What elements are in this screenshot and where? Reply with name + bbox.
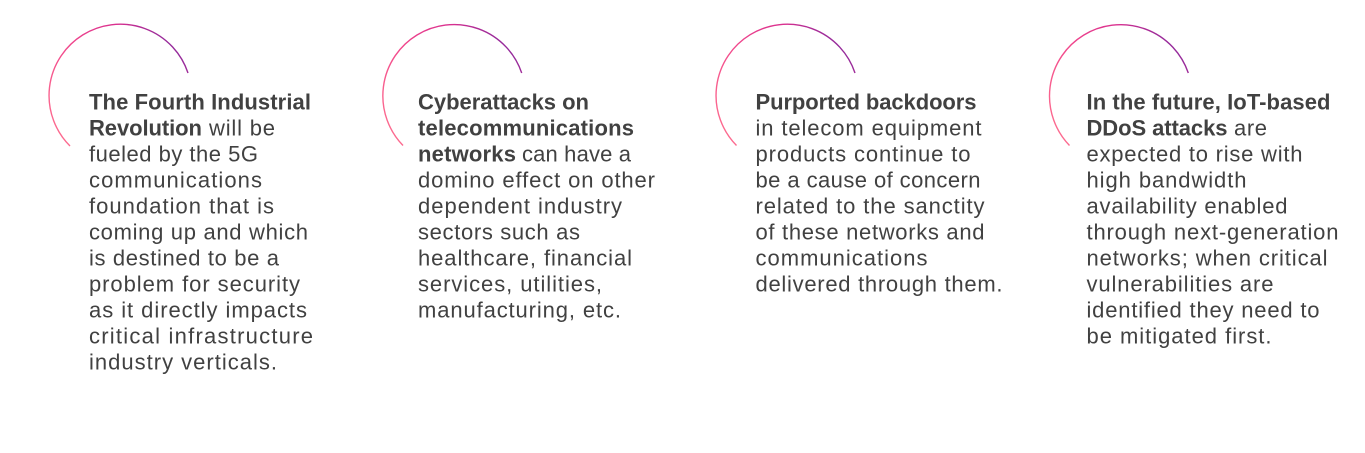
panel: Fourth Industrial Revolution [49,24,313,375]
icon: gradient arc 4 [1050,25,1188,145]
text block: Cyberattacks on telecommunications networks: dependent industry [418,194,622,218]
text block: IoT-based DDoS attacks: identified they need to [1086,298,1320,322]
text block: IoT-based DDoS attacks: In the future, IoT-based [1086,90,1330,114]
text block: Fourth Industrial Revolution [89,90,313,374]
text block: Cyberattacks on telecommunications networks: domino effect on other [418,168,655,192]
text block: Fourth Industrial Revolution: is destined to be a [89,246,280,270]
text block: Purported backdoors [756,90,1002,296]
text block: Fourth Industrial Revolution: coming up and which [89,220,308,244]
text block: IoT-based DDoS attacks: networks; when critical [1086,246,1328,270]
text block: Cyberattacks on telecommunications networks: can have a [522,142,632,166]
panel: IoT-based DDoS attacks [1050,25,1338,348]
text block: Fourth Industrial Revolution: The Fourth Industrial [89,90,311,114]
text block: Cyberattacks on telecommunications networks: networks [418,142,516,166]
text block: Purported backdoors: Purported backdoors [756,90,976,114]
text block: Purported backdoors: related to the sanctity [756,194,984,218]
text block: Purported backdoors: in telecom equipment [756,116,982,140]
text block: Cyberattacks on telecommunications networks: sectors such as [418,220,580,244]
text block: Purported backdoors: communications [756,246,928,270]
text block: Fourth Industrial Revolution: communications [89,168,262,192]
text block: Fourth Industrial Revolution: fueled by the 5G [89,142,258,166]
text block: IoT-based DDoS attacks [1086,90,1338,348]
panel: Cyberattacks on telecommunications networks [383,25,655,322]
text block: IoT-based DDoS attacks: through next-generation [1086,220,1338,244]
text block: IoT-based DDoS attacks: expected to rise with [1086,142,1302,166]
text block: Cyberattacks on telecommunications networks: manufacturing, etc. [418,298,621,322]
text block: IoT-based DDoS attacks: DDoS attacks [1086,116,1228,140]
icon: gradient arc 3 [716,24,855,146]
text block: IoT-based DDoS attacks: be mitigated first. [1086,324,1272,348]
text block: Purported backdoors: of these networks and [756,220,984,244]
text block: Fourth Industrial Revolution: as it directly impacts [89,298,307,322]
text block: Cyberattacks on telecommunications networks: Cyberattacks on [418,90,589,114]
text block: IoT-based DDoS attacks: high bandwidth [1086,168,1246,192]
text block: Fourth Industrial Revolution: will be [208,116,275,140]
text block: Purported backdoors: products continue to [756,142,970,166]
text block: Fourth Industrial Revolution: critical infrastructure [89,324,313,348]
text block: Purported backdoors: be a cause of concern [756,168,980,192]
text block: IoT-based DDoS attacks: are [1234,116,1267,140]
text block: Fourth Industrial Revolution: foundation that is [89,194,274,218]
icon: gradient arc 2 [383,25,522,146]
text block: Cyberattacks on telecommunications networks: healthcare, financial [418,246,632,270]
text block: Fourth Industrial Revolution: industry verticals. [89,350,277,374]
text block: Cyberattacks on telecommunications networks [418,90,655,322]
text block: Purported backdoors: delivered through them. [756,272,1002,296]
panel: Purported backdoors [716,24,1002,297]
text block: IoT-based DDoS attacks: availability enabled [1086,194,1288,218]
text block: IoT-based DDoS attacks: vulnerabilities are [1086,272,1274,296]
icon: gradient arc 1 [49,24,188,146]
text block: Fourth Industrial Revolution: problem for security [89,272,300,296]
text block: Cyberattacks on telecommunications networks: services, utilities, [418,272,602,296]
text block: Cyberattacks on telecommunications networks: telecommunications [418,116,634,140]
text block: Fourth Industrial Revolution: Revolution [89,116,202,140]
